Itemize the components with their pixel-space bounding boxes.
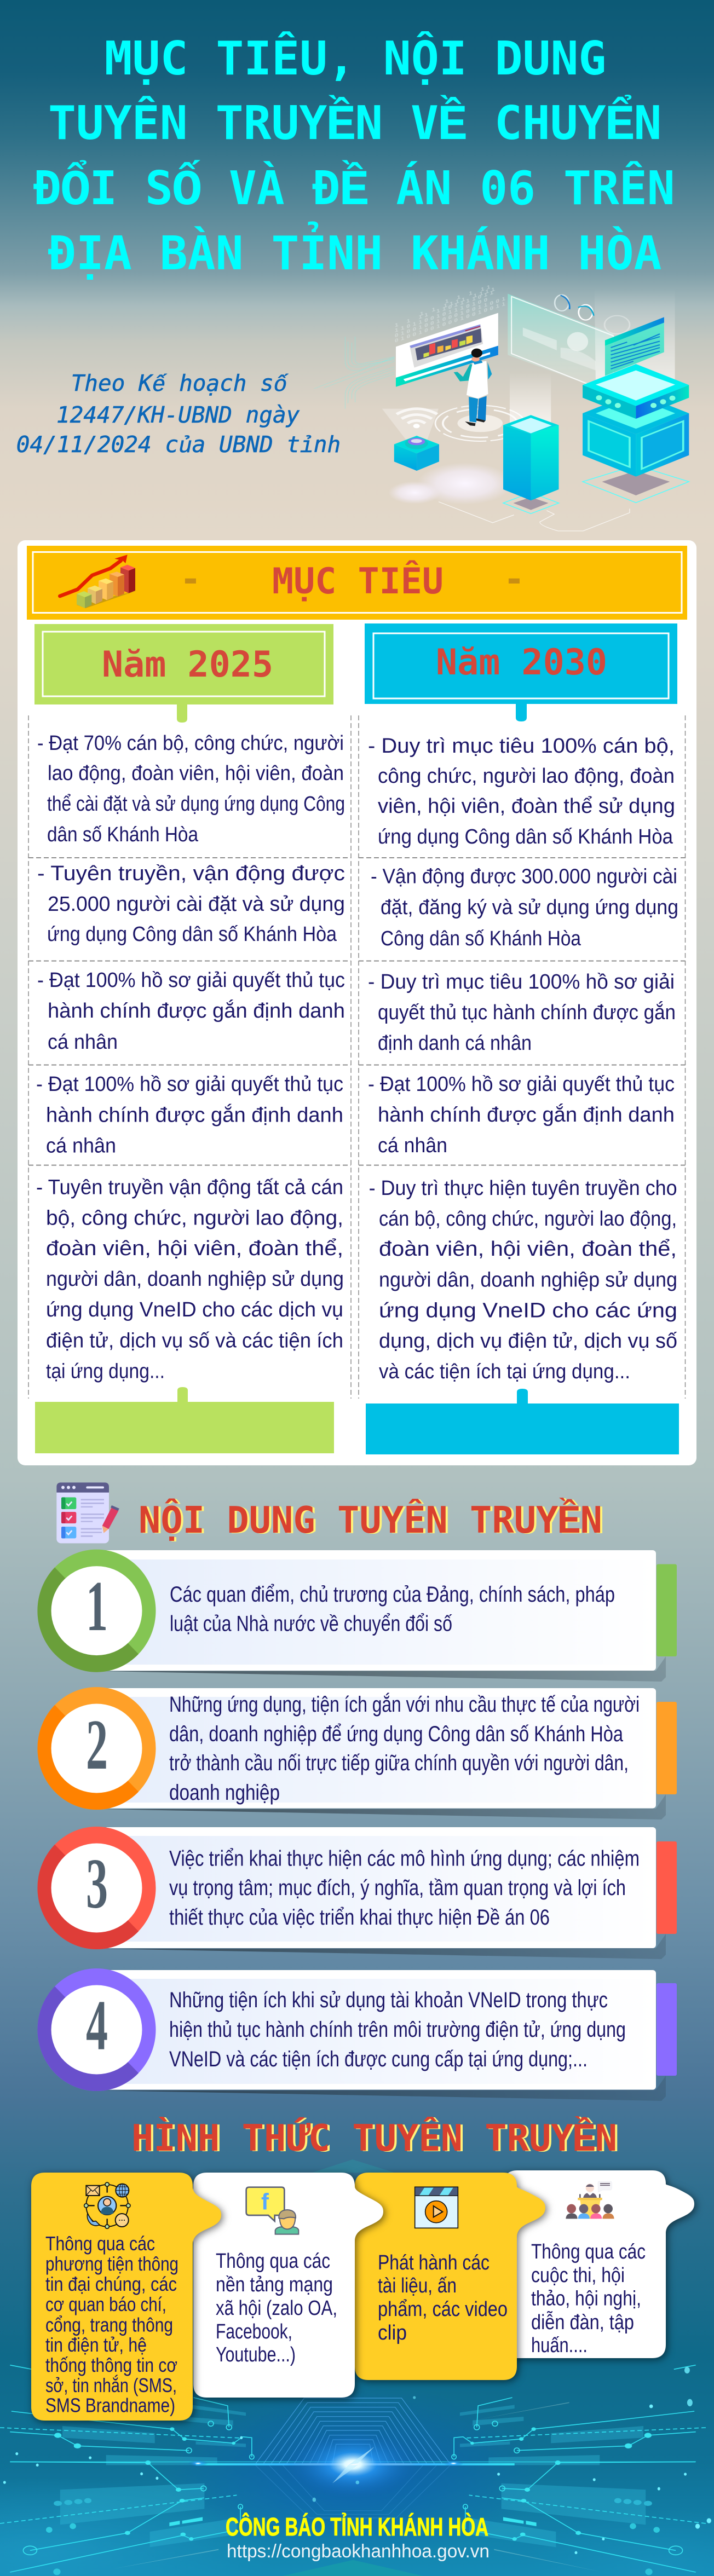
card text: diễn đàn, tập xyxy=(531,2311,634,2334)
binary digits: 0100100100010011001 xyxy=(395,295,508,339)
subtitle: plan reference: a UBND t xyxy=(192,431,300,458)
footer publisher name: CÔNG BÁO TỈNH KHÁNH HÒA xyxy=(226,2513,488,2541)
icon: Facebook speech bubble and user: f xyxy=(261,2189,269,2215)
text block: 2025 target 2: - Tuyên truyền, vận động được xyxy=(37,862,345,885)
card text: Thông qua các xyxy=(531,2240,646,2263)
text block: 2030 target 1: công chức, người lao động, đoàn xyxy=(378,765,675,788)
tall column xyxy=(503,415,558,500)
title: ĐỊA BÀN TỈNH KHÁNH HÒA xyxy=(48,221,661,280)
title: I S xyxy=(89,161,173,215)
subtitle: plan reference: nh xyxy=(314,431,341,458)
title: VÀ Đ xyxy=(201,161,341,215)
card: social networks xyxy=(193,2173,383,2398)
row 4 text: Những tiện ích khi sử dụng tài khoản VNeID trong thực xyxy=(169,1988,608,2012)
card text: SMS Brandname) xyxy=(45,2394,175,2416)
row 1 text: Các quan điểm, chủ trương của Đảng, chính sách, pháp xyxy=(170,1582,615,1607)
heading text: - xyxy=(180,559,201,600)
footer block: 2025 column xyxy=(35,1387,334,1453)
illustration: isometric digital transformation scene xyxy=(314,283,689,531)
header: year 2025: Năm 2025 xyxy=(102,644,273,685)
card text: thống thông tin cơ xyxy=(45,2354,177,2376)
white dashboard screen xyxy=(396,313,498,387)
row 2 text xyxy=(169,1692,640,1805)
text block: 2025 target 3 xyxy=(37,969,345,1054)
text block: 2025 target 3: hành chính được gắn định danh xyxy=(48,999,345,1023)
icon: Facebook speech bubble and user xyxy=(246,2187,298,2234)
heading: propaganda forms: C TUYÊN TRUY xyxy=(308,2116,573,2159)
title: N V xyxy=(355,96,439,150)
text block: 2030 target 2: Công dân số Khánh Hòa xyxy=(381,927,581,950)
text block: 2025 target 3: cá nhân xyxy=(48,1031,118,1054)
card text: Youtube...) xyxy=(216,2343,296,2366)
big cube shadow xyxy=(583,465,689,503)
row 3 text xyxy=(169,1847,640,1930)
card text xyxy=(216,2250,337,2366)
heading text xyxy=(180,559,525,602)
text block: 2025 target 5: đoàn viên, hội viên, đoàn thể, xyxy=(46,1237,343,1260)
text block: 2030 target 5: dụng, dịch vụ điện tử, dịch vụ số xyxy=(379,1330,677,1353)
icon: video clapperboard xyxy=(415,2187,458,2228)
row 3 text: thiết thực của việc triển khai thực hiện Đề án 06 xyxy=(169,1905,550,1930)
text block: 2025 target 1 xyxy=(37,732,345,846)
heading: propaganda forms: Ề xyxy=(572,2116,596,2163)
lavender floor glows xyxy=(417,463,513,505)
row 2 text: doanh nghiệp xyxy=(169,1781,280,1805)
top plate xyxy=(583,364,689,419)
floor rings xyxy=(435,406,525,441)
heading: propaganda content: Ề xyxy=(557,1498,581,1545)
number badge 1: 1 xyxy=(86,1567,108,1646)
title: Ề xyxy=(339,159,370,220)
subtitle: plan reference: ố xyxy=(274,373,289,398)
binary digits: 1 1 1111 1111 xyxy=(420,286,497,317)
heading: propaganda forms: N xyxy=(595,2117,617,2159)
row 4 text: VNeID và các tiện ích được cung cấp tại ứng dụng;... xyxy=(169,2047,588,2071)
card text: tin đại chúng, các xyxy=(45,2273,177,2295)
holographic glass panel xyxy=(508,294,613,394)
panel: objectives xyxy=(18,540,696,1465)
wedge behind cards xyxy=(312,2159,394,2173)
text block: 2030 target 5: cán bộ, công chức, người lao động, xyxy=(379,1208,677,1231)
card text: thảo, hội nghị, xyxy=(531,2287,641,2310)
text block: 2025 target 5: tại ứng dụng... xyxy=(46,1360,165,1383)
header: year 2030 xyxy=(365,623,677,721)
text block: 2030 target 4 xyxy=(368,1073,675,1157)
card text: cuộc thi, hội xyxy=(531,2264,625,2287)
text block: 2030 target 4: hành chính được gắn định danh xyxy=(378,1103,675,1127)
header: year 2030: Năm 2030 xyxy=(436,642,607,683)
heading: propaganda forms: HÌNH TH xyxy=(131,2117,286,2159)
beam over column xyxy=(510,372,551,425)
right circuit, mirrored xyxy=(452,2365,706,2575)
row 2: card xyxy=(37,1687,677,1820)
rings xyxy=(555,295,630,334)
subtitle: plan reference: hoạch s xyxy=(165,370,274,396)
icon: speaker and audience xyxy=(566,2181,614,2219)
card text: phẩm, các video xyxy=(378,2298,508,2321)
row 1: card xyxy=(37,1550,677,1682)
heading: propaganda content: NỘI DUNG TUYÊN TRUY xyxy=(139,1499,558,1541)
subtitle: plan reference: 04/11/2024 c xyxy=(16,431,178,458)
text block: 2030 target 5: - Duy trì thực hiện tuyên truyền cho xyxy=(369,1177,677,1200)
card text: tin điện tử, hệ xyxy=(45,2334,147,2356)
small lens cube with wifi beam xyxy=(382,409,439,471)
text block: 2030 target 3: định danh cá nhân xyxy=(378,1032,532,1055)
text block: 2030 target 2: đặt, đăng ký và sử dụng ứng dụng xyxy=(381,896,678,919)
card text: phương tiện thông xyxy=(45,2252,178,2275)
text block: 2025 target 3: - Đạt 100% hồ sơ giải quyết thủ tục xyxy=(37,969,345,992)
card text: xã hội (zalo OA, xyxy=(216,2297,337,2320)
footer website address: https://congbaokhanhhoa.gov.vn xyxy=(227,2541,490,2562)
text block: 2025 target 5: bộ, công chức, người lao động, xyxy=(46,1207,343,1230)
hexagon tunnel xyxy=(255,2398,451,2518)
text block: 2025 target 5: - Tuyên truyền vận động tất cả cán xyxy=(36,1176,343,1199)
text block: 2030 target 3 xyxy=(368,971,676,1055)
title: Ể xyxy=(605,94,635,154)
card text: huấn.... xyxy=(531,2334,588,2357)
light beam over cube xyxy=(595,288,675,400)
title: Đ xyxy=(33,161,61,215)
card text: clip xyxy=(378,2321,407,2344)
heading: propaganda content: N xyxy=(580,1499,602,1541)
card text: cổng, trang thông xyxy=(45,2313,173,2336)
icon: communication network xyxy=(84,2182,130,2228)
card text: cơ quan báo chí, xyxy=(45,2293,166,2315)
subtitle: plan reference xyxy=(16,370,341,459)
thin floor lines xyxy=(439,502,630,531)
card text xyxy=(378,2251,508,2344)
card text: Thông qua các xyxy=(45,2232,155,2255)
card: meetings and events xyxy=(504,2170,694,2358)
card text xyxy=(531,2240,646,2357)
text block: 2025 target 4 xyxy=(36,1073,343,1158)
text block: 2030 target 1: ứng dụng Công dân số Khánh Hòa xyxy=(378,825,673,848)
text block: 2025 target 1: thể cài đặt và sử dụng ứng dụng Công xyxy=(47,793,345,816)
text block: 2025 target 4: - Đạt 100% hồ sơ giải quyết thủ tục xyxy=(36,1073,343,1096)
title: Ổ xyxy=(60,159,90,220)
title: Ề xyxy=(437,94,468,154)
person xyxy=(454,349,492,426)
icon: rising bar chart xyxy=(60,555,137,608)
card text: tài liệu, ấn xyxy=(378,2274,457,2297)
text block: 2030 target 5: ứng dụng VneID cho các ứng xyxy=(379,1299,677,1322)
text block: 2025 target 1: - Đạt 70% cán bộ, công chức, người xyxy=(37,732,344,755)
text block: 2030 target 3: quyết thủ tục hành chính được gắn xyxy=(378,1001,676,1024)
title: N xyxy=(634,96,661,150)
title: Ề xyxy=(326,94,356,154)
text block: 2030 target 2 xyxy=(371,865,678,950)
text block: 2025 target 2: 25.000 người cài đặt và sử dụng xyxy=(48,893,345,916)
text block: 2030 target 3: - Duy trì mục tiêu 100% hồ sơ giải xyxy=(368,971,675,994)
text block: 2030 target 5 xyxy=(369,1177,677,1383)
subtitle: plan reference: 12447/KH-UBND ngày xyxy=(56,402,300,428)
row 3 text: vụ trọng tâm; mục đích, ý nghĩa, tầm quan trọng và lợi ích xyxy=(169,1876,626,1900)
card text xyxy=(45,2232,178,2416)
text block: 2030 target 5: đoàn viên, hội viên, đoàn thể, xyxy=(379,1238,677,1261)
left circuit xyxy=(0,2365,254,2575)
scattered particles xyxy=(3,2367,711,2554)
row 4 text xyxy=(169,1988,626,2071)
text block: 2030 target 1: - Duy trì mục tiêu 100% cán bộ, xyxy=(368,735,675,758)
column shadow xyxy=(503,493,558,513)
footer technology background xyxy=(0,2365,714,2576)
subtitle: plan reference: ỉ xyxy=(300,434,314,459)
subtitle: plan reference: Theo K xyxy=(71,370,152,396)
text block: 2030 target 4: cá nhân xyxy=(378,1134,447,1157)
number badge 4 xyxy=(37,1968,156,2091)
number badge 4: 4 xyxy=(86,1986,108,2065)
text block: 2030 target 1: viên, hội viên, đoàn thể sử dụng xyxy=(378,795,675,818)
title xyxy=(33,31,675,280)
card text: sở, tin nhắn (SMS, xyxy=(45,2374,177,2396)
icon: checklist with pencil xyxy=(56,1482,119,1543)
row 1 text xyxy=(170,1582,615,1636)
row 2 text: dân, doanh nghiệp để ứng dụng Công dân số Khánh Hòa xyxy=(169,1722,624,1746)
card text: nền tảng mạng xyxy=(216,2273,333,2296)
heading text: - xyxy=(503,559,525,600)
binary digits: 1 1 11 1101111011 xyxy=(395,289,496,328)
row 1 text: luật của Nhà nước về chuyển đổi số xyxy=(170,1612,452,1636)
text block: 2025 target 5: điện tử, dịch vụ số và các tiện ích xyxy=(46,1329,343,1352)
banner: objectives heading xyxy=(27,546,687,620)
text block: 2030 target 2: - Vận động được 300.000 người cài xyxy=(371,865,677,888)
binary digits: 1 1 1 11 xyxy=(445,283,492,305)
subtitle: plan reference: ế xyxy=(152,373,168,398)
text block: 2025 target 4: cá nhân xyxy=(46,1135,116,1158)
heading text: MỤC TIÊU xyxy=(272,559,444,602)
title: TUYÊN TRUY xyxy=(48,96,327,150)
bright starburst on horizon line xyxy=(10,2430,695,2499)
text block: 2025 target 5 xyxy=(36,1176,344,1383)
title: MỤC TIÊU, NỘI DUNG xyxy=(105,31,606,85)
number badge 3 xyxy=(37,1827,156,1949)
number badge 2: 2 xyxy=(86,1705,108,1784)
text block: 2025 target 2: ứng dụng Công dân số Khánh Hòa xyxy=(47,923,337,946)
number badge 1 xyxy=(37,1550,156,1672)
text block: 2025 target 5: ứng dụng VneID cho các dịch vụ xyxy=(46,1298,343,1321)
card text: Thông qua các xyxy=(216,2250,330,2273)
text block: 2030 target 5: và các tiện ích tại ứng dụng... xyxy=(379,1360,630,1383)
title: ÁN 06 TRÊN xyxy=(368,160,675,215)
text block: 2030 target 4: - Đạt 100% hồ sơ giải quyết thủ tục xyxy=(368,1073,675,1096)
light streaks xyxy=(112,2402,601,2572)
card text: Phát hành các xyxy=(378,2251,490,2274)
card text: Facebook, xyxy=(216,2320,292,2343)
row 4: card xyxy=(37,1968,677,2101)
row 3: card xyxy=(37,1827,677,1959)
text block: 2025 target 1: dân số Khánh Hòa xyxy=(47,823,199,846)
card: mass media xyxy=(31,2173,221,2421)
big cube xyxy=(583,392,689,477)
circuit lines xyxy=(314,337,395,409)
binary digits: 1101100101110100 xyxy=(395,296,490,334)
binary digits: 0100100100010010011 xyxy=(395,300,508,344)
number badge 2 xyxy=(37,1687,156,1810)
footer block: 2030 column xyxy=(366,1389,679,1454)
title: CHUY xyxy=(467,96,606,150)
header: year 2025 xyxy=(34,624,333,723)
subtitle: plan reference: ủ xyxy=(178,434,192,459)
title: Ố xyxy=(172,159,202,220)
text block: 2030 target 1 xyxy=(368,735,675,848)
text block: 2025 target 2 xyxy=(37,862,345,946)
card: documents and video clips xyxy=(355,2173,545,2380)
text block: 2025 target 1: lao động, đoàn viên, hội viên, đoàn xyxy=(48,762,344,785)
text block: 2025 target 5: người dân, doanh nghiệp sử dụng xyxy=(46,1268,344,1291)
number badge 3: 3 xyxy=(86,1844,108,1924)
text block: 2025 target 4: hành chính được gắn định danh xyxy=(46,1104,343,1127)
green data panel xyxy=(605,317,664,376)
heading: propaganda forms: Ứ xyxy=(285,2117,310,2163)
text block: 2030 target 5: người dân, doanh nghiệp sử dụng xyxy=(379,1269,677,1292)
